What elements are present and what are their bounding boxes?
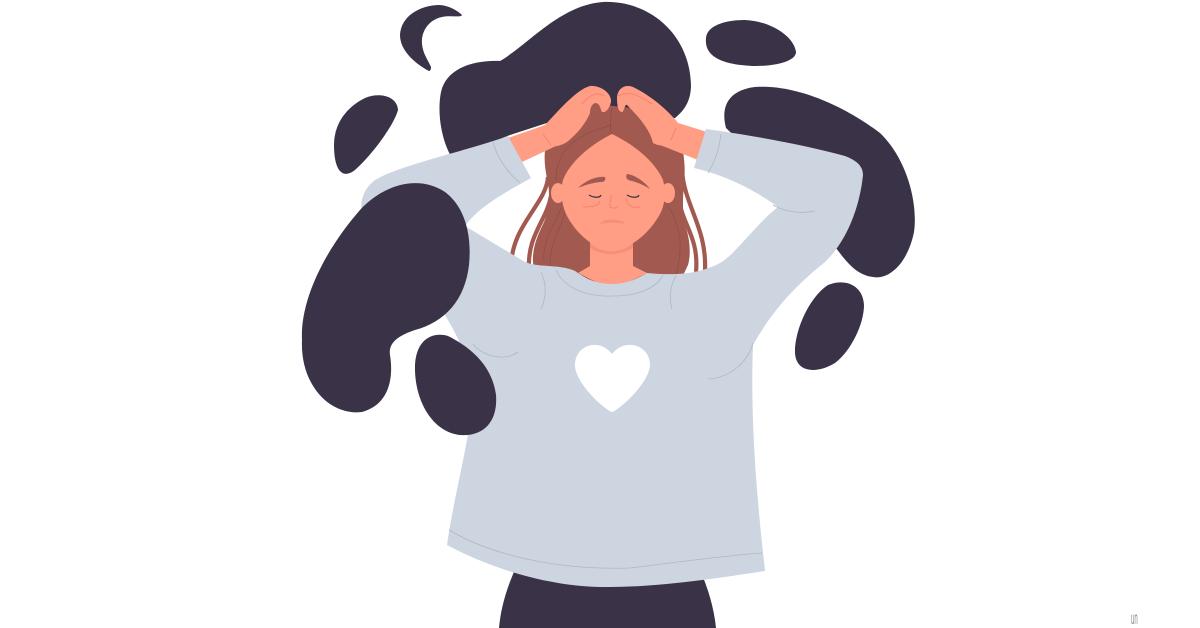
blob: small lower right bbox=[795, 282, 864, 370]
heart bbox=[575, 345, 650, 412]
blob: top centre behind head bbox=[439, 2, 691, 158]
face bbox=[562, 134, 665, 250]
hair strands back bbox=[511, 170, 705, 272]
blob: large left over sleeve bbox=[302, 183, 470, 412]
sweater bbox=[361, 129, 863, 587]
eyebrow left bbox=[578, 177, 605, 188]
blob: small oval top right bbox=[706, 20, 796, 66]
hand right bbox=[617, 86, 682, 146]
neck bbox=[578, 235, 647, 290]
watermark: un bbox=[1131, 608, 1138, 628]
eyebrow right bbox=[626, 174, 650, 189]
hand left bbox=[543, 86, 611, 146]
hand lines bbox=[543, 94, 676, 145]
blob: large right behind sleeve bbox=[724, 87, 915, 277]
hair lines bbox=[544, 107, 680, 275]
ear left bbox=[551, 183, 565, 203]
eyes bbox=[589, 195, 639, 197]
figure: woman bbox=[361, 86, 863, 587]
arm left bbox=[508, 124, 556, 162]
ear right bbox=[661, 183, 675, 203]
neck shadow bbox=[590, 243, 633, 254]
mouth bbox=[601, 220, 624, 223]
eye bags and nose bbox=[583, 195, 640, 208]
blob: lower left bbox=[415, 335, 496, 435]
blob: crescent top left bbox=[400, 5, 462, 71]
blob: small left bbox=[334, 95, 398, 174]
sweater seams bbox=[449, 134, 815, 568]
arm right bbox=[655, 122, 707, 160]
hair bbox=[533, 102, 690, 285]
leggings bbox=[499, 565, 716, 628]
